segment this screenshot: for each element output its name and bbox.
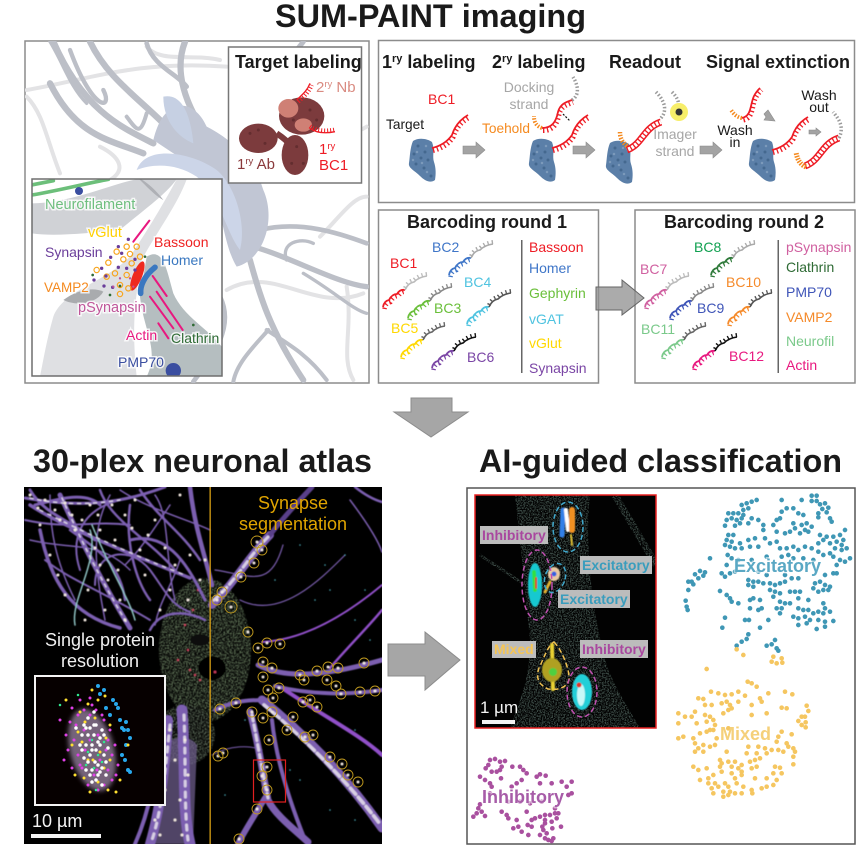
scale label: 1 µm: 1 µm <box>480 698 518 717</box>
arrow: atlas to classification <box>388 632 460 690</box>
inset: synapse classification image <box>475 495 656 728</box>
tag: Excitatory: Excitatory <box>582 557 650 573</box>
target list round 1: Homer <box>529 260 571 276</box>
strand labels round 2: BC11 <box>641 321 675 337</box>
strand labels round 2 <box>640 239 764 364</box>
barcode strands 7 to 12 <box>645 242 772 370</box>
panel: synapse inset <box>32 177 222 378</box>
synapse illustration <box>32 177 222 378</box>
label: 1ry Ab: Ab <box>253 156 275 173</box>
target list round 1: Synapsin <box>529 360 587 376</box>
target list round 1: Gephyrin <box>529 285 586 301</box>
scatter: excitatory cluster <box>686 496 850 651</box>
label: Toehold: Toehold <box>482 121 530 136</box>
label: 2ry Nb: ry <box>324 79 333 90</box>
heading: 30-plex neuronal atlas: 30-plex neuronal atlas <box>33 443 372 479</box>
target list round 2: Actin <box>786 357 817 373</box>
scatter: mixed cluster <box>678 649 808 797</box>
heading: 2ry labeling: 2 <box>492 52 502 72</box>
scale bar <box>482 720 515 724</box>
panel: barcoding round 1 <box>378 210 598 383</box>
label: 1ry BC1: 1 <box>319 141 336 158</box>
arrows: process steps <box>463 110 821 158</box>
tag: Mixed: Mixed <box>494 641 534 657</box>
tag: Inhibitory: Inhibitory <box>482 527 546 543</box>
heading: 1ry labeling: labeling <box>402 52 475 72</box>
heading: 1ry labeling: 1 <box>382 52 392 72</box>
label: Wash out: Wash <box>801 87 837 103</box>
heading: Readout: Readout <box>609 52 681 72</box>
label: VAMP2: VAMP2 <box>44 280 89 295</box>
label: Imager strand: strand <box>656 143 694 159</box>
icon: antibody with nanobody <box>239 83 335 175</box>
strand labels round 2: BC10 <box>726 274 761 290</box>
label: BC1: BC1 <box>428 91 455 107</box>
heading: 2ry labeling: labeling <box>512 52 585 72</box>
barcode strands 1 to 6 <box>383 242 511 370</box>
tag: Inhibitory: Inhibitory <box>582 641 646 657</box>
segmented synapse rings <box>212 536 380 844</box>
panel: target labeling <box>228 47 362 183</box>
panel: neuronal atlas microscopy <box>24 487 382 844</box>
heading: 2ry labeling: ry <box>502 53 513 65</box>
label: Docking strand: strand <box>510 96 548 112</box>
label: 2ry Nb: 2 <box>316 79 324 96</box>
label: Wash out: out <box>809 99 829 115</box>
strand labels round 1: BC5 <box>391 320 418 336</box>
label: Homer: Homer <box>161 252 203 268</box>
arrow: down to atlas and classification <box>394 398 468 437</box>
scatter label: Excitatory: Excitatory <box>734 556 821 576</box>
label: Single protein resolution: resolution <box>61 651 139 671</box>
heading: barcoding round 1: Barcoding round 1 <box>407 212 567 232</box>
heading: 1ry labeling: ry <box>392 53 403 65</box>
label: Bassoon: Bassoon <box>154 234 208 250</box>
panel: AI-guided classification <box>467 488 855 844</box>
heading: AI-guided classification: AI-guided classification <box>479 443 842 479</box>
scatter label: Inhibitory: Inhibitory <box>482 787 564 807</box>
scale bar <box>31 834 101 838</box>
label: Synapse segmentation: segmentation <box>239 514 347 534</box>
target list round 2: Clathrin <box>786 259 834 275</box>
target list round 1: vGAT <box>529 311 564 327</box>
strand labels round 2: BC7 <box>640 261 667 277</box>
neuron illustration <box>27 42 367 382</box>
strand labels round 2: BC9 <box>697 300 724 316</box>
label: Neurofilament: Neurofilament <box>45 197 135 213</box>
heading: Signal extinction: Signal extinction <box>706 52 850 72</box>
label: PMP70: PMP70 <box>118 354 164 370</box>
label: Docking strand: Docking <box>504 79 554 95</box>
strand labels round 2: BC12 <box>729 348 764 364</box>
label: pSynapsin: pSynapsin <box>78 300 146 316</box>
label: Synapse segmentation: Synapse <box>258 493 328 513</box>
panel: labeling workflow <box>378 40 854 202</box>
diagram: target proteins and strands <box>409 77 841 184</box>
panel: neuron with target labeling <box>25 41 369 383</box>
label: Synapsin: Synapsin <box>45 244 103 260</box>
heading: barcoding round 2: Barcoding round 2 <box>664 212 824 232</box>
label: vGlut: vGlut <box>88 225 122 241</box>
label: Wash in: Wash <box>717 122 753 138</box>
scale label: 10 µm: 10 µm <box>32 811 82 831</box>
arrow: round 1 to round 2 <box>596 280 644 315</box>
strand labels round 1: BC4 <box>464 274 491 290</box>
highlight: red region box <box>254 760 286 802</box>
target list round 2 <box>778 239 851 373</box>
scatter label: Mixed: Mixed <box>720 724 771 744</box>
strand labels round 2: BC8 <box>694 239 721 255</box>
target list round 2: VAMP2 <box>786 309 833 325</box>
label: 1ry Ab: 1 <box>237 156 245 173</box>
strand labels round 1: BC6 <box>467 349 494 365</box>
label: Imager strand: Imager <box>653 126 697 142</box>
label: 1ry BC1: ry <box>327 141 336 152</box>
label: Clathrin: Clathrin <box>171 330 219 346</box>
label: 2ry Nb: Nb <box>332 79 356 96</box>
scatter: inhibitory cluster <box>473 759 572 841</box>
label: Wash in: in <box>730 134 740 150</box>
label: Single protein resolution: Single protein <box>45 630 155 650</box>
label: Target: Target <box>386 117 424 132</box>
strand labels round 1 <box>390 239 494 365</box>
target list round 2: Neurofil <box>786 333 834 349</box>
divider: segmentation split line <box>210 487 211 844</box>
target list round 1 <box>521 239 587 376</box>
inset: single protein cloud <box>35 676 165 805</box>
target list round 2: PMP70 <box>786 284 832 300</box>
target list round 1: Bassoon <box>529 239 583 255</box>
label: 1ry Ab: ry <box>245 156 254 167</box>
label: Actin: Actin <box>126 327 157 343</box>
label: 1ry BC1: BC1 <box>319 157 348 174</box>
target list round 1: vGlut <box>529 335 562 351</box>
panel: barcoding round 2 <box>635 210 855 383</box>
tag: Excitatory: Excitatory <box>560 591 628 607</box>
strand labels round 1: BC2 <box>432 239 459 255</box>
microscopy image <box>25 487 382 844</box>
heading: target labeling: Target labeling <box>235 52 362 72</box>
strand labels round 1: BC1 <box>390 255 417 271</box>
target list round 2: pSynapsin <box>786 239 851 255</box>
strand labels round 1: BC3 <box>434 300 461 316</box>
